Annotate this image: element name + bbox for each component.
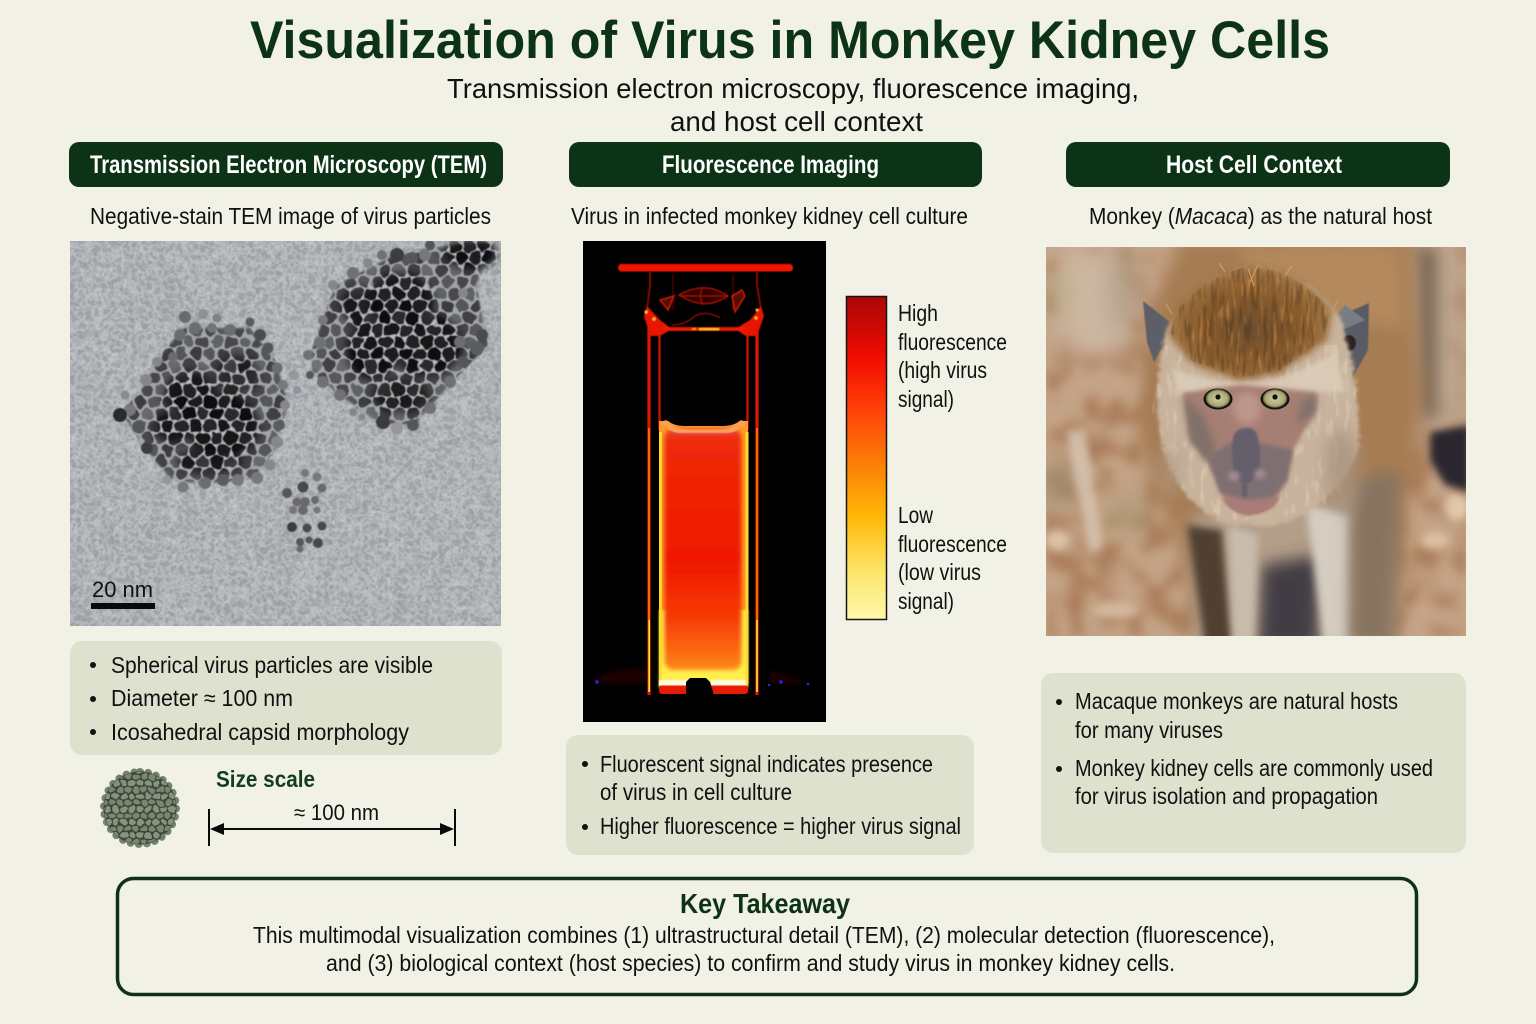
size scale label: ≈ 100 nm [294, 800, 379, 825]
key takeaway text [253, 922, 1275, 976]
scale bar: 20 nm [91, 603, 155, 609]
key takeaway text: and (3) biological context (host species) to confirm and study virus in monkey kidney cells. [326, 950, 1175, 976]
subtitle [447, 73, 1139, 137]
fluorescence image: cuvette [583, 241, 826, 722]
host bullet list [1041, 673, 1466, 853]
heading: Host Cell Context [1066, 142, 1450, 187]
title: Visualization of Virus in Monkey Kidney Cells [250, 11, 1330, 70]
macaque ears [1143, 301, 1369, 377]
heading: Fluorescence [569, 142, 982, 187]
fluorescence bullet list: Fluorescent signal indicates presence [600, 751, 933, 777]
macaque eyes [1204, 388, 1290, 410]
color scale label: low [898, 502, 1007, 614]
heading: Fluorescence: Fluorescence Imaging [662, 151, 879, 179]
macaque face [1183, 385, 1317, 515]
host bullet list: for many viruses [1075, 717, 1223, 743]
key takeaway text: This multimodal visualization combines (1) ultrastructural detail (TEM), (2) molecular detection (fluorescence), [253, 922, 1275, 948]
panel: Fluorescence [566, 142, 1007, 855]
cuvette walls [649, 328, 757, 695]
heading: TEM [69, 142, 503, 187]
fluorescence bullet list [566, 735, 974, 855]
color scale label: low: signal) [898, 588, 954, 614]
panel: TEM [60, 142, 511, 858]
panel: Host Cell Context [1041, 142, 1470, 853]
callout: key takeaway [118, 878, 1416, 994]
small particle cluster [282, 469, 326, 552]
arrow: size scale [209, 809, 455, 846]
subtitle: and host cell context [670, 106, 923, 137]
host caption: Monkey (Macaca) as the natural host [1089, 203, 1433, 229]
host bullet list: Macaque monkeys are natural hosts [1075, 688, 1398, 714]
heading: Host Cell Context: Host Cell Context [1166, 151, 1343, 179]
host bullet list: for virus isolation and propagation [1075, 783, 1378, 809]
color scale label: high [898, 300, 1007, 412]
TEM caption: Negative-stain TEM image of virus particles [90, 203, 491, 229]
size scale heading: Size scale [216, 766, 315, 792]
color scale label: high: High [898, 300, 938, 326]
color scale label: low: (low virus [898, 559, 981, 585]
icon: virus particle [100, 768, 180, 848]
headspace [666, 419, 741, 426]
host bullet list: Monkey kidney cells are commonly used [1075, 755, 1433, 781]
TEM micrograph [60, 231, 511, 636]
photo: macaque [1045, 240, 1470, 650]
TEM bullet list [70, 641, 502, 755]
heading: TEM: Transmission Electron Microscopy (TEM) [90, 151, 487, 179]
macaque body [1138, 240, 1423, 650]
color scale label: high: signal) [898, 386, 954, 412]
fluorescence bullet list: Higher fluorescence = higher virus signal [600, 813, 961, 839]
color scale label: high: (high virus [898, 357, 987, 383]
TEM bullet list: Icosahedral capsid morphology [111, 719, 409, 745]
fluorescent liquid [659, 421, 748, 695]
fluorescence bullet list: of virus in cell culture [600, 779, 792, 805]
TEM bullet list: Spherical virus particles are visible [111, 652, 433, 678]
cuvette cap [618, 264, 793, 336]
color scale bar [846, 296, 886, 620]
virus particle clusters [112, 241, 501, 553]
scale label: 20 nm: 20 nm [92, 577, 153, 602]
color scale label: high: fluorescence [898, 329, 1007, 355]
color scale label: low: fluorescence [898, 531, 1007, 557]
TEM bullet list: Diameter ≈ 100 nm [111, 685, 293, 711]
macaque head [1152, 262, 1365, 527]
key takeaway heading: Key Takeaway [680, 888, 850, 919]
fluorescence caption: Virus in infected monkey kidney cell culture [571, 203, 968, 229]
color scale label: low: Low [898, 502, 933, 528]
subtitle: Transmission electron microscopy, fluorescence imaging, [447, 73, 1139, 104]
